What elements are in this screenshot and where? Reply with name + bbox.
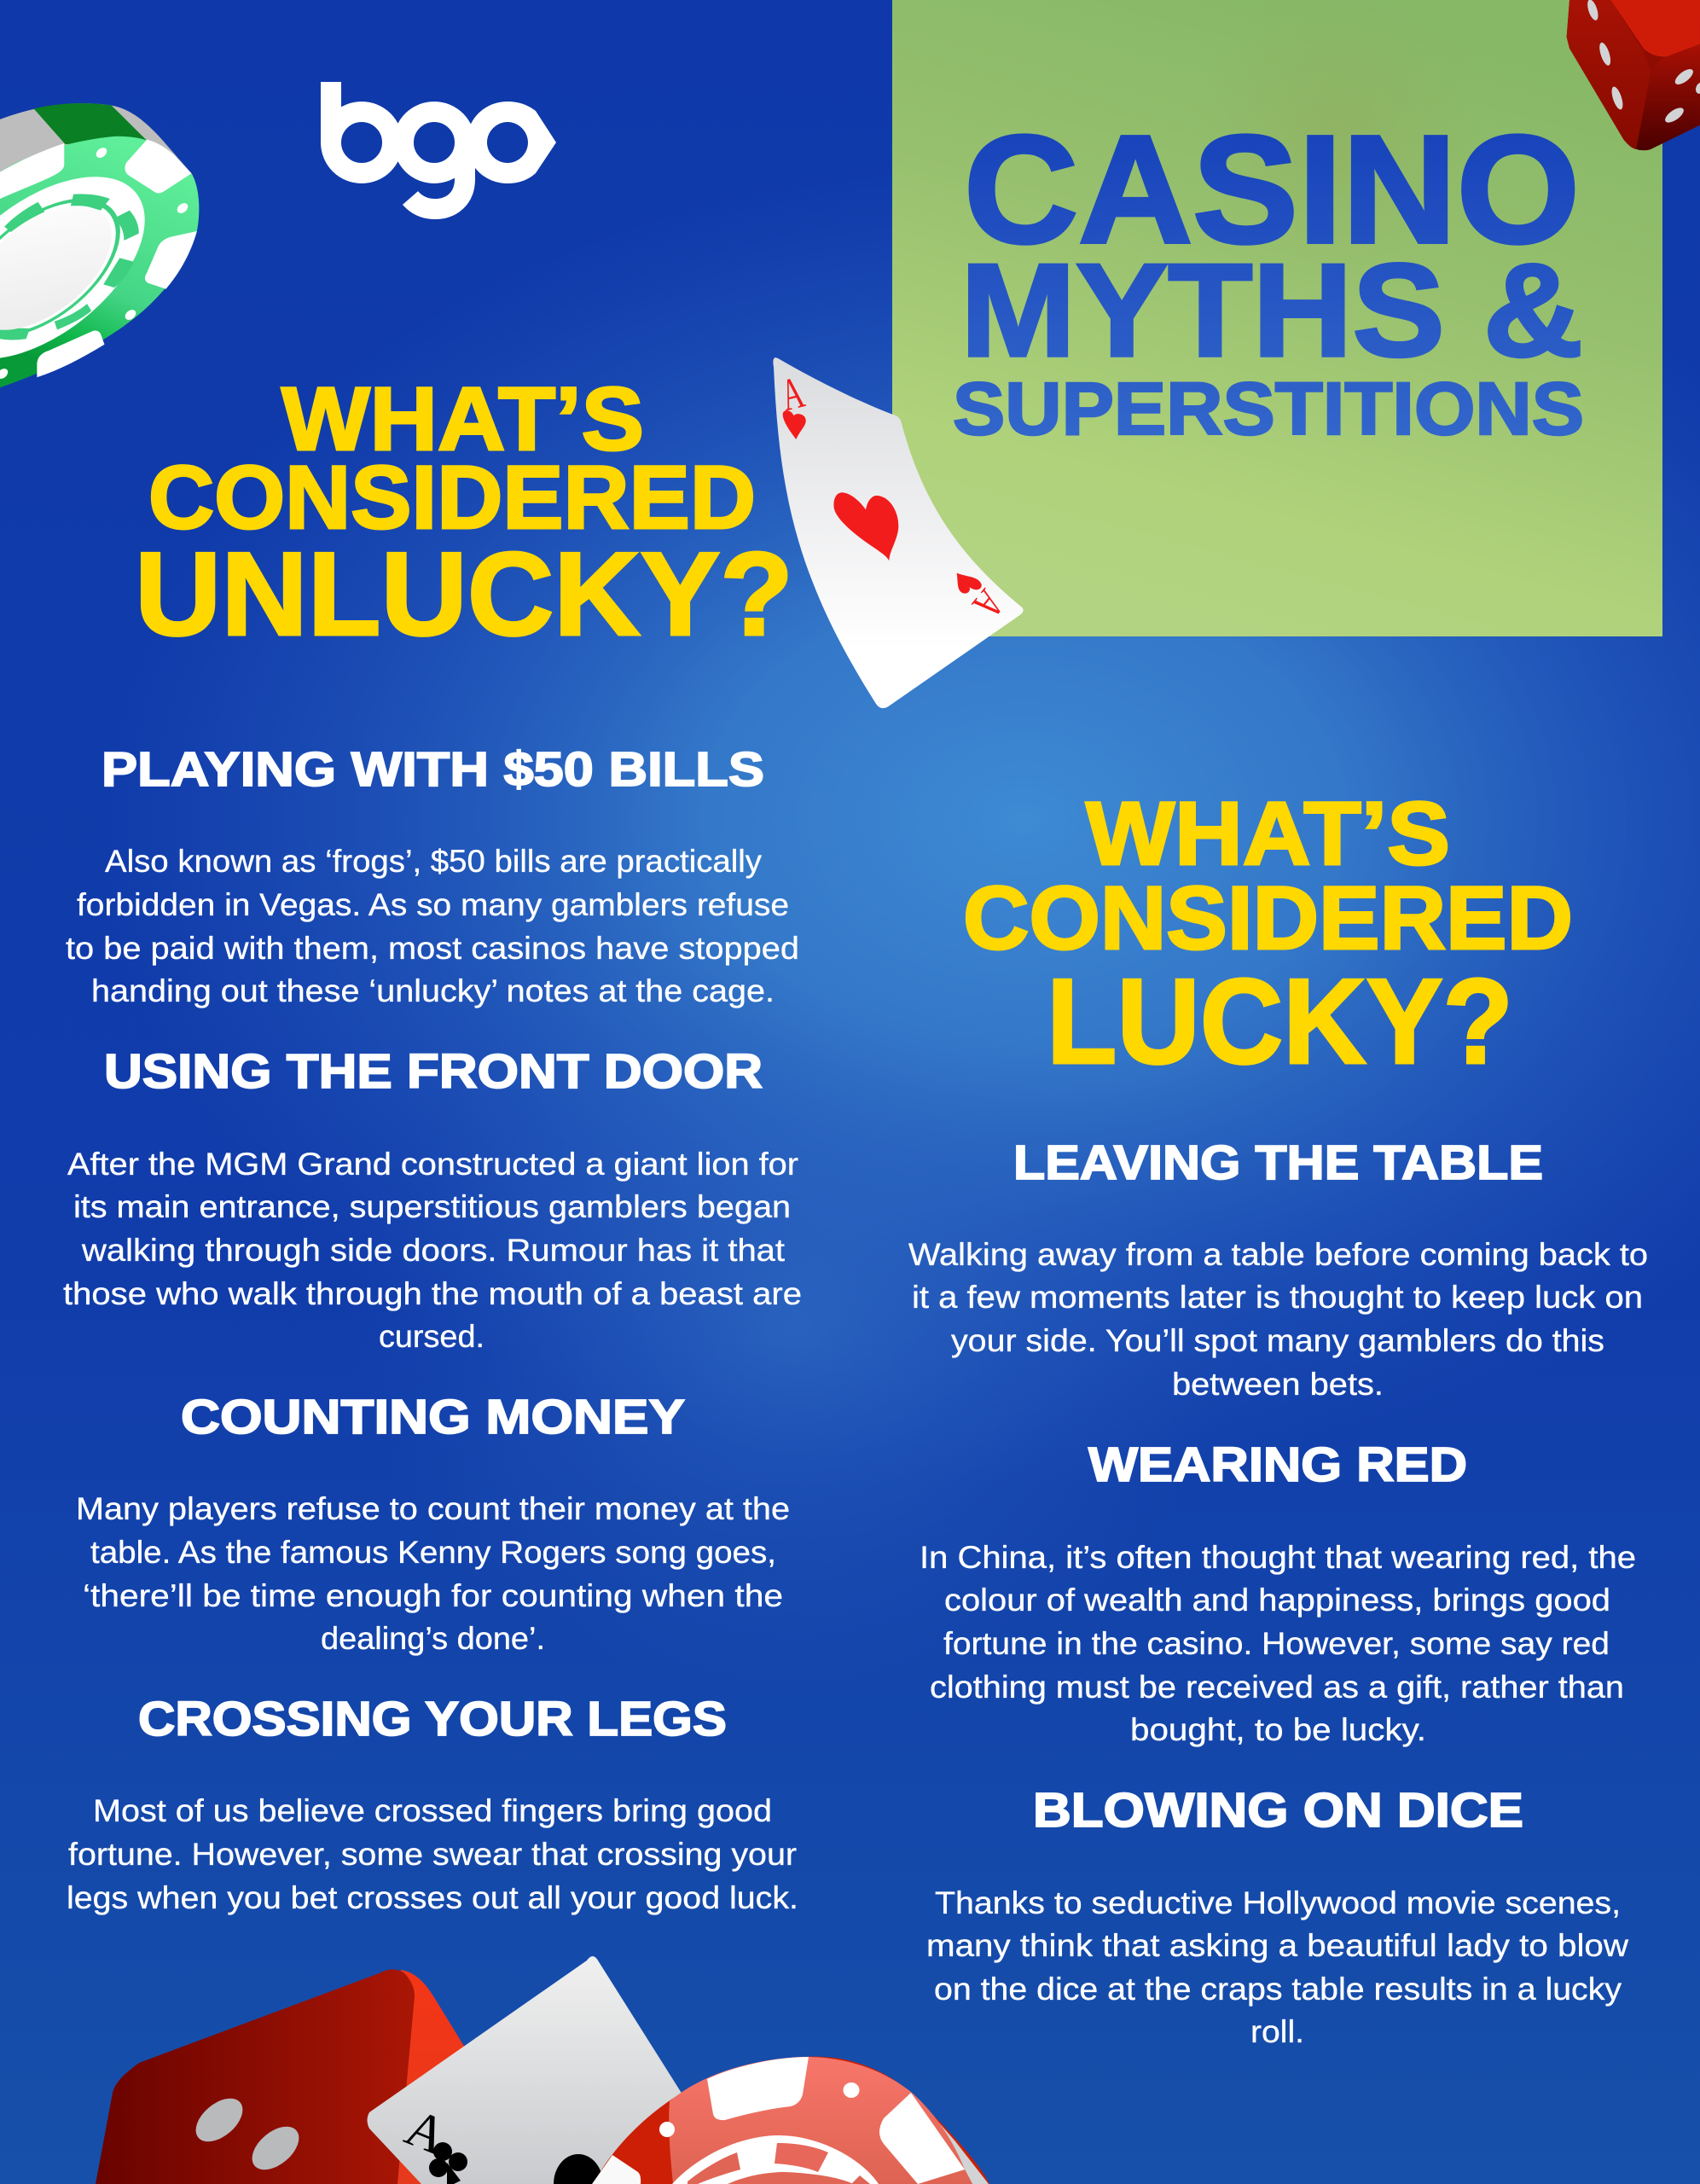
panel: title background (892, 0, 1662, 636)
section: playing with $50 bills: PLAYING WITH $50 BILLS (102, 742, 764, 797)
section: leaving the table: it a few moments later is thought to keep luck on (912, 1280, 1643, 1315)
section: playing with $50 bills: Also known as ‘frogs’, $50 bills are practically (105, 844, 763, 879)
section: blowing on dice: BLOWING ON DICE (1033, 1783, 1523, 1838)
icon: green poker chip (0, 103, 199, 395)
section: using the front door: its main entrance, superstitious gamblers began (73, 1189, 791, 1224)
heading: what's considered unlucky: UNLUCKY? (135, 528, 793, 660)
section: counting money: dealing’s done’. (321, 1621, 545, 1656)
section: using the front door: walking through side doors. Rumour has it that (81, 1233, 786, 1268)
title (953, 104, 1584, 450)
icon: ace of hearts card (773, 357, 1024, 708)
section: leaving the table: Walking away from a table before coming back to (908, 1237, 1648, 1272)
section: wearing red (920, 1438, 1636, 1747)
title: SUPERSTITIONS (953, 368, 1584, 450)
heading: what's considered lucky: LUCKY? (1047, 954, 1513, 1089)
section: crossing your legs: Most of us believe crossed fingers bring good (93, 1793, 772, 1828)
section: wearing red: fortune in the casino. However, some say red (943, 1626, 1610, 1661)
icon: red die top right (1567, 0, 1700, 150)
section: playing with $50 bills: forbidden in Vegas. As so many gamblers refuse (77, 887, 789, 922)
icon: ace of hearts card: A (964, 581, 1012, 627)
section: playing with $50 bills (66, 742, 799, 1008)
section: wearing red: WEARING RED (1088, 1438, 1467, 1492)
section: counting money: COUNTING MONEY (181, 1390, 685, 1444)
section: playing with $50 bills: to be paid with them, most casinos have stopped (66, 931, 799, 966)
icon: ace of hearts card: A (776, 367, 809, 421)
section: leaving the table (908, 1136, 1648, 1402)
section: counting money: ‘there’ll be time enough for counting when the (83, 1578, 783, 1613)
section: crossing your legs (67, 1692, 798, 1915)
section: leaving the table: LEAVING THE TABLE (1013, 1136, 1543, 1190)
section: leaving the table: between bets. (1172, 1367, 1384, 1402)
heading: what's considered lucky: CONSIDERED (963, 868, 1573, 968)
section: using the front door: cursed. (379, 1319, 484, 1354)
section: wearing red: colour of wealth and happiness, brings good (944, 1583, 1610, 1618)
section: counting money: table. As the famous Kenny Rogers song goes, (90, 1535, 776, 1570)
section: wearing red: clothing must be received as a gift, rather than (930, 1670, 1624, 1705)
heading: what's considered lucky: WHAT’S (1086, 784, 1450, 884)
section: counting money (76, 1390, 790, 1656)
title: MYTHS & (960, 236, 1583, 384)
section: blowing on dice: on the dice at the craps table results in a lucky (934, 1972, 1622, 2007)
section: using the front door: those who walk through the mouth of a beast are (63, 1276, 802, 1311)
section: wearing red: In China, it’s often thought that wearing red, the (920, 1540, 1636, 1575)
section: blowing on dice: Thanks to seductive Hollywood movie scenes, (935, 1885, 1621, 1920)
section: leaving the table: your side. You’ll spot many gamblers do this (951, 1323, 1604, 1358)
heading: what's considered unlucky: CONSIDERED (148, 448, 756, 548)
heading: what's considered unlucky (135, 369, 793, 660)
section: crossing your legs: legs when you bet crosses out all your good luck. (67, 1880, 798, 1915)
icon: ace of clubs card (367, 1956, 682, 2184)
heading: what's considered unlucky: WHAT’S (281, 369, 644, 469)
logo: bgo (321, 82, 556, 209)
icon: ace of clubs card: A (397, 2099, 455, 2166)
icon: red die bottom left (96, 1970, 465, 2184)
section: blowing on dice: many think that asking a beautiful lady to blow (926, 1928, 1628, 1963)
section: playing with $50 bills: handing out these ‘unlucky’ notes at the cage. (91, 973, 775, 1008)
heading: what's considered lucky (963, 784, 1573, 1089)
section: using the front door: After the MGM Grand constructed a giant lion for (67, 1147, 798, 1182)
section: counting money: Many players refuse to count their money at the (76, 1491, 790, 1526)
section: crossing your legs: CROSSING YOUR LEGS (138, 1692, 727, 1746)
section: wearing red: bought, to be lucky. (1130, 1712, 1426, 1747)
section: using the front door: USING THE FRONT DOOR (104, 1044, 763, 1099)
section: blowing on dice: roll. (1250, 2014, 1304, 2049)
section: using the front door (63, 1044, 802, 1354)
section: crossing your legs: fortune. However, some swear that crossing your (68, 1837, 797, 1872)
section: blowing on dice (926, 1783, 1628, 2049)
icon: red poker chip (592, 2057, 989, 2184)
title: CASINO (964, 104, 1580, 276)
